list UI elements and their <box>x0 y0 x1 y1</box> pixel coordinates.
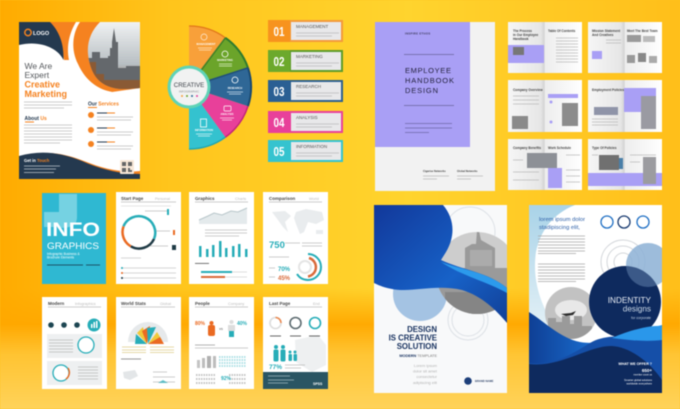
panel: world stats page <box>116 297 181 389</box>
panel: handbook spread 6 <box>588 139 662 190</box>
ring chart <box>297 254 321 280</box>
panel: last page: End <box>313 302 320 306</box>
panel: handbook spread 4 <box>588 80 662 132</box>
panel: people page: People <box>195 301 210 306</box>
map shade <box>295 335 326 372</box>
panel: modern page: Modern <box>48 301 64 306</box>
brand mark: BRAND NAME <box>475 379 494 383</box>
panel: start page <box>116 192 181 284</box>
navy circle with title: designs <box>623 304 651 314</box>
pale blue circle <box>626 242 662 286</box>
bar chart <box>199 241 248 257</box>
percent comparison: 40% <box>237 321 248 327</box>
panel: handbook spread 1: Handbook <box>513 37 529 41</box>
item 01 management: MANAGEMENT <box>296 24 329 29</box>
handbook footer columns: Cigarise Networks <box>423 169 446 173</box>
flyer bottom band with contact <box>19 153 140 179</box>
item 04 analysis: 04 <box>274 115 285 130</box>
swoosh highlight <box>441 262 507 293</box>
note text <box>205 230 247 236</box>
panel: handbook spread 5: Company Benefits <box>513 146 541 150</box>
cover title: GRAPHICS <box>47 241 99 251</box>
handbook title: EMPLOYEE <box>405 66 451 75</box>
legend <box>121 258 176 278</box>
flyer headline: Expert <box>24 70 50 80</box>
flyer headline <box>389 325 437 351</box>
flyer heading: stadipiscing elit, <box>539 225 580 231</box>
wedge: cyan: INFORMATION <box>195 128 213 132</box>
world map <box>272 209 324 234</box>
item 02 marketing: MARKETING <box>296 54 323 59</box>
offer text: worldwide everywhere <box>626 382 653 386</box>
navy circle with title <box>588 244 662 338</box>
pale blue circle <box>392 287 447 322</box>
cover title: Brochure Elements <box>47 256 75 260</box>
bottom waves <box>529 312 662 393</box>
flyer orange wedge and crescent <box>48 22 140 92</box>
dark footer: SPSS <box>313 382 323 386</box>
callouts <box>145 211 170 246</box>
wedge: pink: ANALYSIS <box>221 112 234 116</box>
handbook rules <box>404 54 454 106</box>
flyer headline: DESIGN <box>407 325 437 334</box>
panel: handbook spread 5 <box>508 139 582 190</box>
lorem text: Lorem ipsum <box>414 363 438 368</box>
panel: handbook spread 1: Table Of Contents <box>548 29 575 33</box>
panel: numbered list <box>268 20 343 162</box>
donut chart <box>123 216 155 249</box>
flyer headline: Creative <box>24 80 60 90</box>
big number 750: 750 <box>269 240 285 251</box>
block 2 <box>47 361 102 385</box>
lorem text: consectetur <box>416 374 438 379</box>
cover title: Infographic Business & <box>47 252 80 256</box>
77 percent: 77% <box>269 364 282 371</box>
panel: start page: Personal <box>155 197 170 201</box>
panel: comparison page <box>263 192 328 284</box>
handbook title <box>405 66 454 95</box>
stats <box>278 267 291 282</box>
block 1 <box>47 334 102 358</box>
panel: handbook spread 2 <box>588 22 662 73</box>
panel: comparison page: Comparison <box>269 196 296 201</box>
panel: handbook spread 2: Meet The Best Team <box>627 29 658 33</box>
building photo circle <box>436 231 507 314</box>
flyer QR code <box>120 160 134 174</box>
three rings <box>601 216 649 228</box>
lorem text: adipiscing elit <box>413 380 438 385</box>
panel: world stats page: World Stats <box>121 301 146 306</box>
panel: handbook spread 1: in Our Employee <box>513 33 539 37</box>
item 05 information: INFORMATION <box>296 144 327 149</box>
flyer headline: Marketing <box>24 89 67 99</box>
template label: MODERN TEMPLATE <box>399 354 437 358</box>
item 03 research <box>268 80 343 102</box>
lorem text: dolor sit amet <box>413 368 438 374</box>
flyer bottom band with contact: Get in Touch <box>24 158 50 163</box>
panel: graphics page <box>189 192 254 284</box>
panel: comparison page: World <box>309 197 319 201</box>
center badge: INFOGRAPHIC <box>179 90 199 94</box>
panel: graphics page: Graphics <box>195 196 215 201</box>
panel: handbook spread 5: Work Schedule <box>548 146 571 150</box>
blue swoosh <box>374 205 507 323</box>
flyer navy corner with logo <box>19 22 64 60</box>
flyer headline <box>24 61 67 99</box>
item 03 research: 03 <box>274 84 284 99</box>
item 01 management <box>268 20 343 42</box>
panel: blue design flyer <box>374 205 507 393</box>
offer text: WHAT WE OFFER ? <box>618 362 652 366</box>
offer text <box>618 362 653 386</box>
navy circle with title: INDENTITY <box>608 296 652 305</box>
flyer white arc <box>68 22 112 92</box>
percent comparison: 80% <box>195 321 206 327</box>
lower section <box>121 359 175 383</box>
panel: modern page: Infographics <box>75 302 96 306</box>
flyer headline: We Are <box>24 61 52 71</box>
cover footer <box>47 264 100 266</box>
wedge: orange: MANAGEMENT <box>197 42 216 46</box>
handbook title: HANDBOOK <box>405 76 454 85</box>
flyer our services <box>88 102 133 149</box>
panel: handbook spread 1: The Process <box>513 29 532 33</box>
flyer about us <box>24 116 72 143</box>
item 05 information <box>268 140 343 162</box>
handbook title: DESIGN <box>405 86 438 95</box>
wedge: green: MARKETING <box>217 58 233 62</box>
item 01 management: 01 <box>274 24 284 39</box>
family pictogram <box>274 345 297 362</box>
offer text: 650+ <box>642 368 652 373</box>
panel: start page: Start Page <box>121 196 144 201</box>
cover title: INFO <box>46 220 100 241</box>
icon row <box>48 318 100 332</box>
center badge: CREATIVE <box>174 82 204 89</box>
brand mark <box>464 377 494 385</box>
flyer headline: IS CREATIVE <box>389 334 437 342</box>
panel: creative infographic wheel <box>168 26 251 149</box>
panel: handbook spread 3: Company Overview <box>513 88 543 92</box>
people pictogram: 92% <box>221 376 232 382</box>
panel: employee handbook cover <box>375 22 495 191</box>
panel: people page: Company <box>228 302 244 306</box>
panel: modern page <box>42 297 107 389</box>
flyer about us: About Us <box>24 116 47 122</box>
panel: info graphics cover <box>42 193 106 284</box>
item 03 research: RESEARCH <box>296 84 321 89</box>
radial bar chart <box>128 322 168 344</box>
gauge labels <box>270 335 320 337</box>
faint rings <box>600 239 638 274</box>
panel: people page <box>189 297 254 389</box>
stats: 45% <box>278 276 291 282</box>
panel: handbook spread 3 <box>508 80 582 132</box>
flyer navy corner with logo: LOGO <box>33 31 50 37</box>
panel: world stats page: Global <box>160 302 171 306</box>
percent comparison: VS <box>219 327 223 331</box>
panel: orange marketing flyer <box>19 22 140 179</box>
panel: handbook spread 2: Mission Statement <box>592 29 621 33</box>
handbook brand: INSPIRE ETHOS <box>405 32 431 36</box>
navy circle with title: for corporate <box>631 316 651 320</box>
item 02 marketing: 02 <box>274 54 284 69</box>
cover pale blocks <box>44 194 77 228</box>
line chart <box>199 208 247 224</box>
body text lines <box>538 236 585 282</box>
cover title <box>46 220 100 260</box>
panel: last page: Last Page <box>269 301 291 306</box>
horizontal progress bars <box>195 263 247 278</box>
item 05 information: 05 <box>274 144 284 159</box>
panel: handbook spread 4: Employment Policies <box>592 88 624 92</box>
lorem text <box>413 363 438 385</box>
wedge: blue: RESEARCH <box>228 86 242 90</box>
pale swoosh <box>529 205 575 330</box>
three ring gauges <box>270 318 320 328</box>
item 04 analysis <box>268 111 343 133</box>
stats: 70% <box>278 267 291 273</box>
panel: handbook spread 1 <box>508 22 582 73</box>
flyer headline: SOLUTION <box>397 342 437 351</box>
table rows <box>122 347 174 352</box>
flyer heading <box>539 217 585 231</box>
panel: last page <box>263 297 328 389</box>
flyer city photo <box>87 21 141 90</box>
flyer heading: lorem ipsum dolor <box>539 217 585 223</box>
flyer intro text lines <box>24 102 72 108</box>
panel: identity designs flyer <box>529 205 670 393</box>
handbook description lines <box>405 124 452 132</box>
handbook footer columns: Global Networks <box>457 169 478 173</box>
item 04 analysis: ANALYSIS <box>296 115 318 120</box>
panel: handbook spread 2: And Creatives <box>592 33 614 37</box>
percent comparison <box>195 320 248 337</box>
city photo circle <box>545 287 597 340</box>
handbook footer columns <box>423 169 483 179</box>
panel: graphics page: Charts <box>235 197 246 201</box>
faint ring circles <box>445 207 495 340</box>
item 02 marketing <box>268 50 343 72</box>
panel: handbook spread 6: Type Of Policies <box>592 146 617 150</box>
flyer our services: Our Services <box>88 102 119 108</box>
center badge <box>168 66 210 108</box>
offer text: member count us <box>634 374 653 376</box>
offer text: Smarter global solutions <box>624 378 653 382</box>
